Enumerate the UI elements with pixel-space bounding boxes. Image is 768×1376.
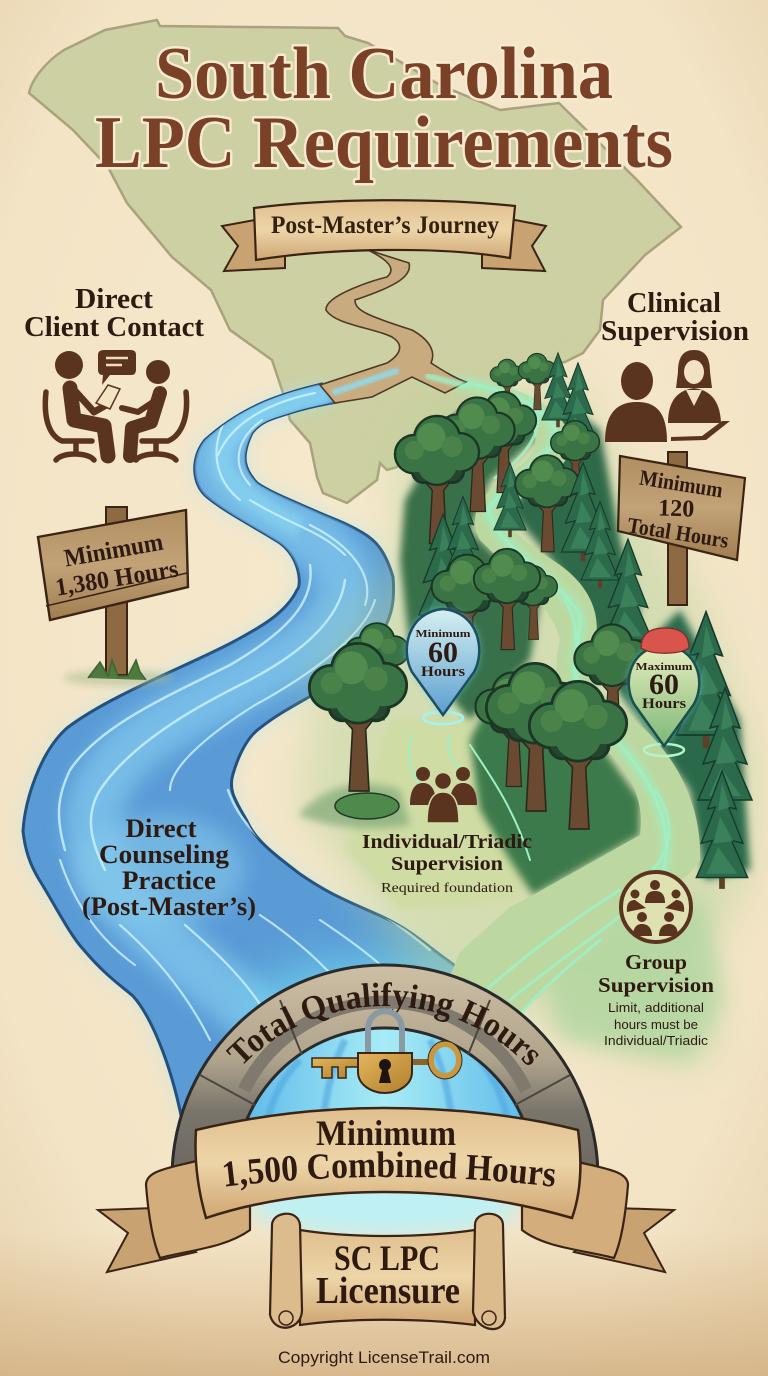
arch: Total Qualifying Hours bbox=[170, 964, 600, 1166]
text: Direct Counseling Practice: Practice bbox=[122, 866, 216, 895]
pin: Maximum 60 Hours: Maximum bbox=[636, 661, 692, 673]
heading: Clinical Supervision: Clinical bbox=[627, 288, 721, 319]
trail: supervision path bbox=[409, 372, 700, 1040]
text: Group Supervision: Group bbox=[625, 950, 687, 974]
sign: Minimum 120 Total Hours: 120 bbox=[658, 495, 695, 523]
text: Individual/Triadic Supervision: Supervision bbox=[391, 853, 503, 875]
forest: trees bbox=[310, 353, 752, 889]
title: South Carolina bbox=[155, 33, 613, 115]
heading: Direct Client Contact: Client Contact bbox=[24, 312, 205, 343]
icon: group supervision circle bbox=[621, 872, 691, 942]
title bbox=[95, 33, 673, 184]
arch: Total Qualifying Hours: Total Qualifying Hours bbox=[226, 982, 539, 1065]
text: Direct Counseling Practice: (Post-Master’s) bbox=[82, 892, 256, 921]
sign: Minimum 120 Total Hours bbox=[618, 452, 745, 605]
heading: Clinical Supervision: Supervision bbox=[601, 316, 749, 347]
text: Direct Counseling Practice bbox=[82, 814, 256, 921]
banner: Post-Master's Journey bbox=[222, 200, 546, 271]
icon: padlock and key bbox=[312, 1011, 462, 1093]
banner: Minimum 1,500 Combined Hours bbox=[95, 1106, 677, 1274]
heading: Direct Client Contact bbox=[24, 284, 205, 343]
heading: Clinical Supervision bbox=[601, 288, 749, 347]
banner: Minimum 1,500 Combined Hours: Minimum bbox=[316, 1113, 456, 1153]
road: Post-Master's journey stem bbox=[320, 250, 466, 403]
sign: Minimum 120 Total Hours: Total Hours bbox=[626, 512, 731, 553]
icon: two people in counseling session bbox=[45, 350, 187, 460]
scroll: SC LPC Licensure: Licensure bbox=[316, 1270, 460, 1312]
text: Direct Counseling Practice: Counseling bbox=[99, 840, 229, 869]
pin: Maximum 60 Hours: Hours bbox=[642, 696, 686, 712]
sign: Minimum 120 Total Hours: Minimum bbox=[638, 465, 725, 503]
pin: Maximum 60 Hours: 60 bbox=[649, 668, 679, 701]
scroll: SC LPC Licensure: SC LPC bbox=[334, 1238, 440, 1278]
sign: Minimum 1,380 Hours bbox=[38, 507, 188, 686]
forest ground wash bbox=[298, 380, 755, 1060]
map: South Carolina outline bbox=[29, 20, 681, 503]
pin: Minimum 60 Hours: 60 bbox=[428, 636, 458, 669]
text: Individual/Triadic Supervision: Individual/Triadic bbox=[362, 831, 532, 853]
banner: Post-Master's Journey: Post-Master’s Journey bbox=[271, 212, 499, 239]
glow under banner bbox=[250, 1173, 520, 1237]
icon: individual/triadic group bbox=[410, 767, 477, 823]
pin: Minimum 60 Hours bbox=[407, 609, 479, 724]
pin: Maximum 60 Hours bbox=[629, 628, 699, 756]
sign: Minimum 1,380 Hours: 1,380 Hours bbox=[53, 556, 180, 602]
pin: Minimum 60 Hours: Minimum bbox=[416, 628, 470, 640]
title: LPC Requirements bbox=[95, 102, 673, 184]
text: Direct Counseling Practice: Direct bbox=[126, 814, 197, 843]
text: Group Supervision: Individual/Triadic bbox=[604, 1033, 709, 1048]
scroll: SC LPC Licensure bbox=[270, 1214, 505, 1329]
text: Group Supervision: Limit, additional bbox=[608, 1000, 704, 1015]
text: Group Supervision: Supervision bbox=[598, 973, 714, 997]
icon: clinical supervisor and supervisee bbox=[605, 350, 730, 442]
sign: Minimum 1,380 Hours: Minimum bbox=[62, 529, 165, 573]
pin: Minimum 60 Hours: Hours bbox=[421, 664, 465, 680]
copyright: Copyright LicenseTrail.com bbox=[278, 1349, 490, 1367]
text: Group Supervision: hours must be bbox=[614, 1017, 698, 1032]
text: Individual/Triadic Supervision: Required foundation bbox=[381, 880, 513, 895]
text: Group Supervision bbox=[598, 950, 714, 1048]
heading: Direct Client Contact: Direct bbox=[75, 284, 154, 315]
banner: Minimum 1,500 Combined Hours: 1,500 Combined Hours bbox=[224, 1151, 555, 1190]
river: direct counseling practice bbox=[16, 380, 456, 1118]
text: Individual/Triadic Supervision bbox=[362, 831, 532, 895]
